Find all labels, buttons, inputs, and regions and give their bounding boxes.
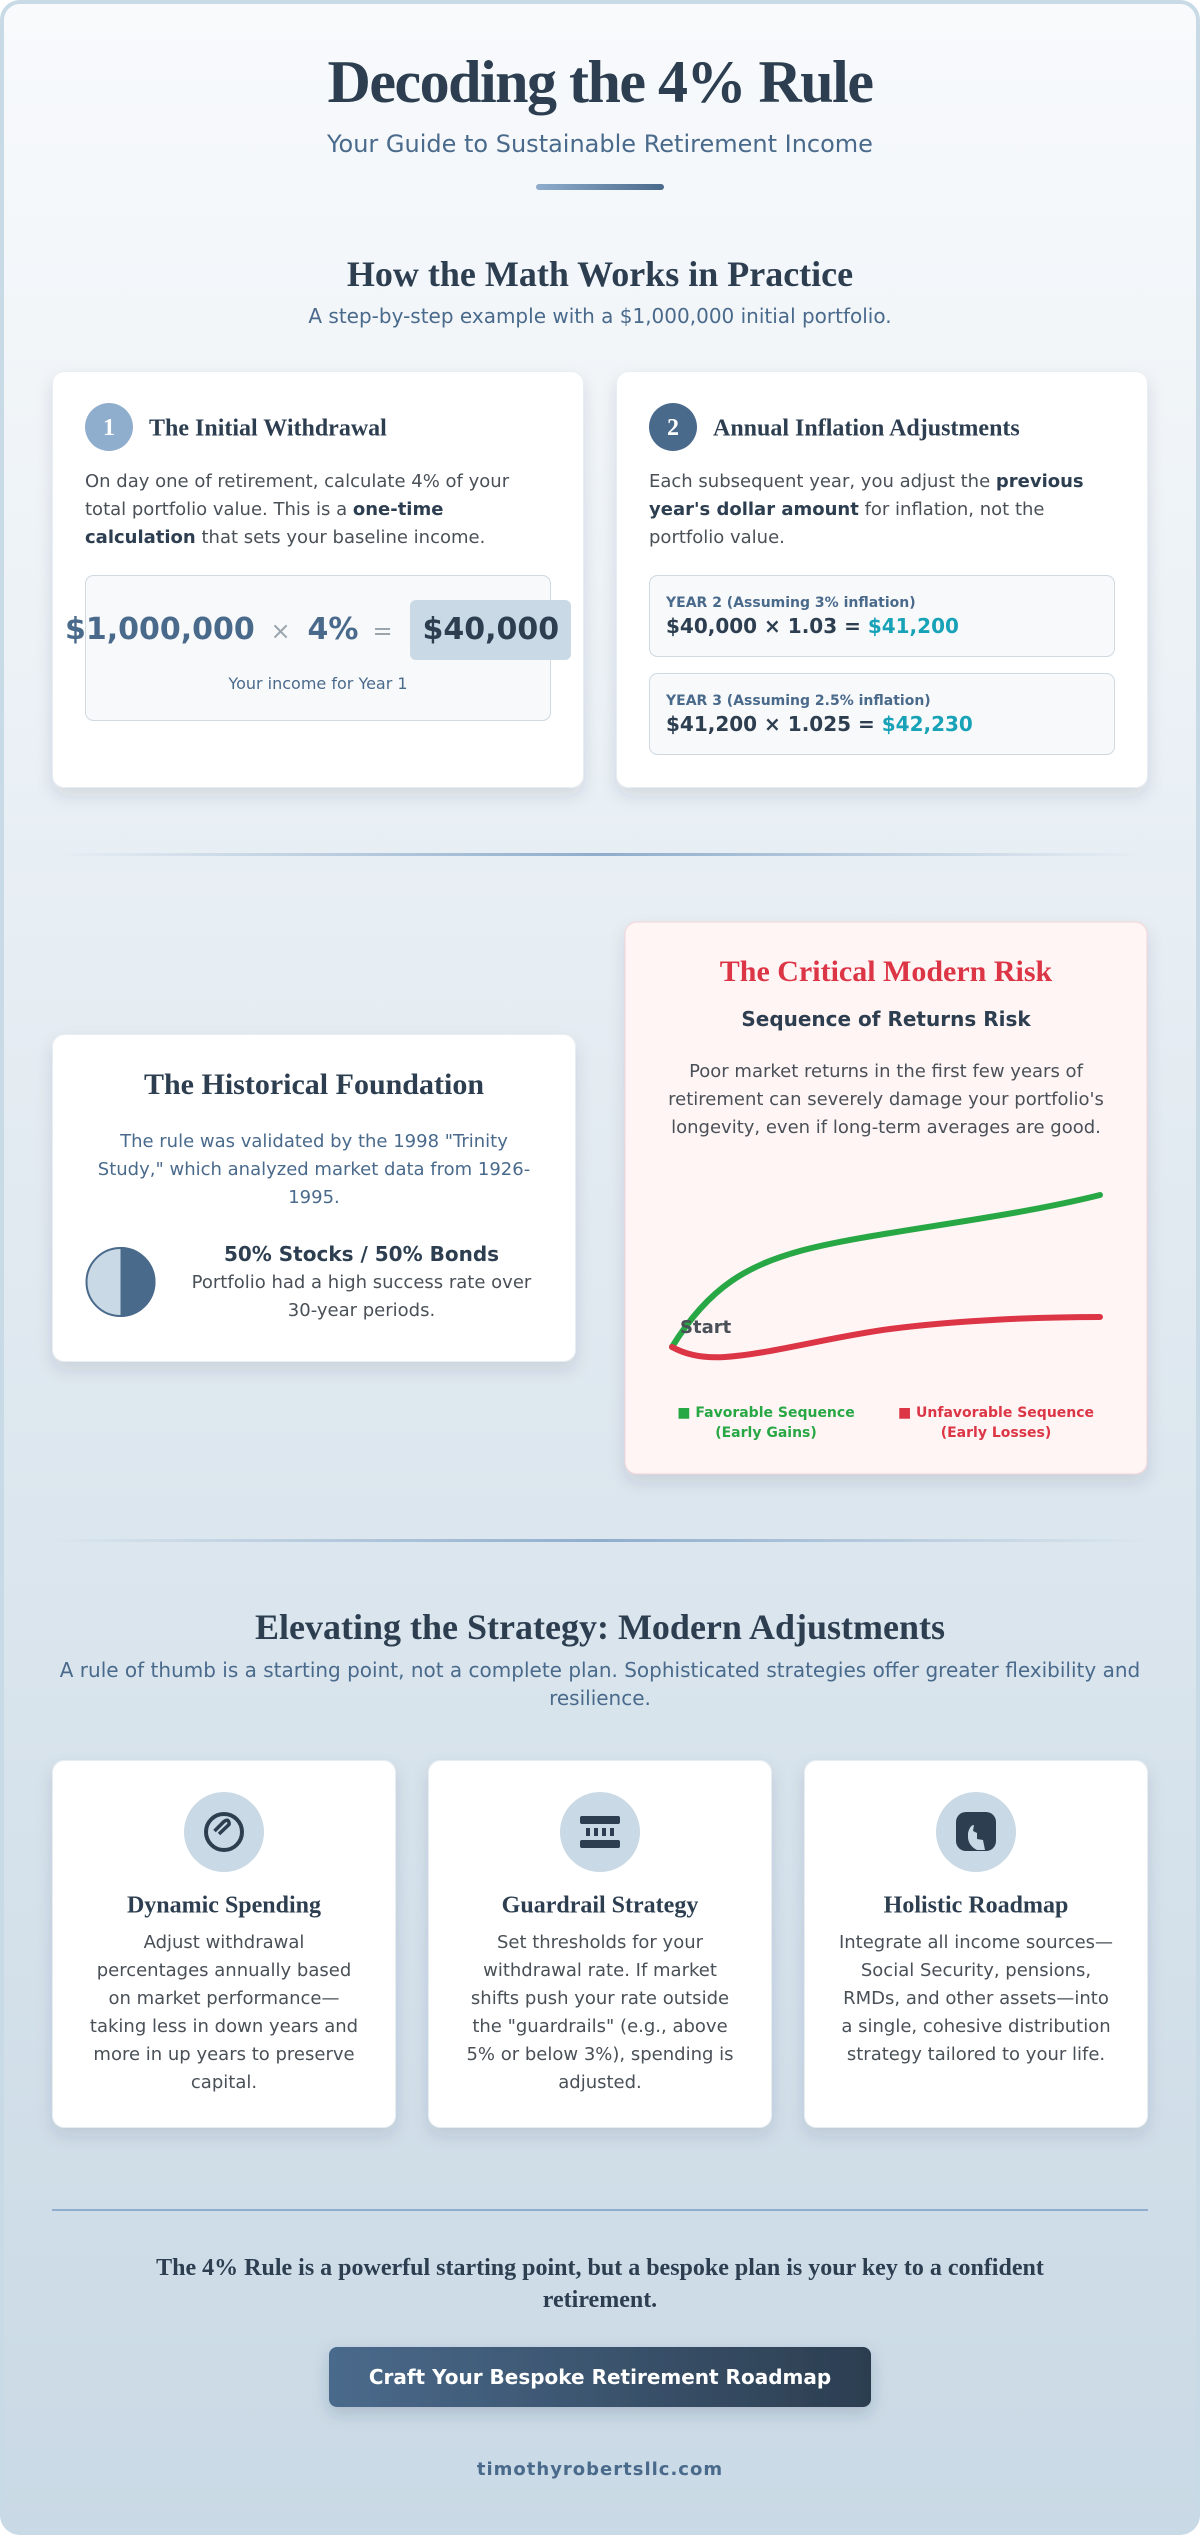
website url: timothyrobertsllc.com (477, 2459, 723, 2480)
title: Decoding the 4% Rule (328, 49, 873, 115)
year 3 box: $41,200 × 1.025 = $42,230 (666, 712, 973, 736)
subtitle: Your Guide to Sustainable Retirement Income (326, 130, 873, 158)
description: retirement can severely damage your portfolio's (668, 1089, 1104, 1110)
year 2 box (650, 576, 1114, 656)
description: Adjust withdrawal (144, 1932, 304, 1953)
description: The rule was validated by the 1998 "Trinity (119, 1131, 508, 1152)
description (466, 1932, 734, 2093)
step 2 heading: Annual Inflation Adjustments (713, 416, 1020, 442)
call to action button: Craft Your Bespoke Retirement Roadmap (369, 2365, 831, 2389)
year 3 box: YEAR 3 (Assuming 2.5% inflation) (665, 693, 931, 709)
step 2 text: portfolio value. (649, 527, 785, 548)
section heading: how the math works: A step-by-step example with a $1,000,000 initial portfolio. (308, 304, 892, 328)
line chart: sequence of returns (672, 1195, 1100, 1357)
step 2 text: year's dollar amount for inflation, not the (649, 499, 1044, 520)
description: Poor market returns in the first few years of (689, 1061, 1084, 1082)
formula box: 4% (308, 612, 358, 647)
description: Social Security, pensions, (861, 1960, 1091, 1981)
panel: critical modern risk (625, 922, 1147, 1474)
description (98, 1131, 530, 1208)
description: capital. (191, 2072, 257, 2093)
description (90, 1932, 358, 2093)
icon: guardrails (560, 1792, 640, 1872)
section heading: modern adjustments: A rule of thumb is a starting point, not a complete plan. Sophisticated strategies offer greater flexibility and (60, 1658, 1140, 1682)
section heading: how the math works (308, 254, 892, 328)
description: on market performance— (108, 1988, 340, 2009)
call to action button (329, 2347, 871, 2407)
allocation text (192, 1242, 532, 1321)
allocation text: Portfolio had a high success rate over (192, 1272, 532, 1293)
icon: step number 1: 1 (103, 415, 115, 441)
icon: step number 1 (85, 403, 133, 451)
formula box: = (372, 617, 393, 645)
panel: step 2 annual inflation adjustments (616, 372, 1148, 788)
legend: (Early Losses) (941, 1425, 1051, 1441)
icon: step number 2: 2 (667, 415, 679, 441)
heading: Holistic Roadmap (884, 1892, 1068, 1918)
legend: ■ Favorable Sequence (677, 1405, 855, 1421)
description: taking less in down years and (90, 2016, 358, 2037)
allocation text: 50% Stocks / 50% Bonds (224, 1242, 499, 1266)
header (326, 49, 873, 190)
heading: Guardrail Strategy (502, 1892, 698, 1918)
result highlight (410, 600, 571, 660)
description: RMDs, and other assets—into (843, 1988, 1109, 2009)
description: longevity, even if long-term averages are good. (671, 1117, 1101, 1138)
closing statement: The 4% Rule is a powerful starting point, but a bespoke plan is your key to a confident (156, 2255, 1044, 2281)
description: adjusted. (558, 2072, 642, 2093)
pie chart: 50/50 allocation (86, 1247, 156, 1317)
step 1 heading: The Initial Withdrawal (149, 416, 387, 442)
panel: step 1 initial withdrawal (52, 372, 584, 788)
closing statement (156, 2255, 1044, 2313)
legend: ■ Unfavorable Sequence (898, 1405, 1094, 1421)
description: 1995. (288, 1187, 340, 1208)
description: shifts push your rate outside (471, 1988, 729, 2009)
heading: The Historical Foundation (144, 1068, 484, 1101)
description: withdrawal rate. If market (483, 1960, 717, 1981)
section heading: modern adjustments (60, 1607, 1140, 1710)
section heading: modern adjustments: resilience. (549, 1686, 651, 1710)
formula box: × (270, 617, 291, 645)
description: Integrate all income sources— (839, 1932, 1113, 1953)
description: strategy tailored to your life. (847, 2044, 1105, 2065)
section heading: how the math works: How the Math Works in Practice (347, 254, 853, 294)
heading: Dynamic Spending (127, 1892, 321, 1918)
description: Study," which analyzed market data from 1926- (98, 1159, 530, 1180)
step 2 text (649, 471, 1084, 548)
description: the "guardrails" (e.g., above (472, 2016, 728, 2037)
formula box: Your income for Year 1 (227, 674, 408, 693)
step 1 text (85, 471, 510, 548)
icon: roadmap (936, 1792, 1016, 1872)
closing statement: retirement. (543, 2287, 657, 2313)
description (839, 1932, 1113, 2065)
formula box: $40,000 (422, 612, 559, 647)
year 2 box: YEAR 2 (Assuming 3% inflation) (665, 595, 916, 611)
icon: step number 2 (649, 403, 697, 451)
step 1 text: calculation that sets your baseline income. (85, 527, 485, 548)
panel: holistic roadmap (804, 1760, 1148, 2128)
description (668, 1061, 1104, 1138)
panel: guardrail strategy (428, 1760, 772, 2128)
section heading: modern adjustments: Elevating the Strategy: Modern Adjustments (255, 1607, 945, 1647)
legend (677, 1405, 1094, 1441)
allocation text: 30-year periods. (288, 1300, 435, 1321)
formula box (65, 576, 571, 720)
step 1 text: On day one of retirement, calculate 4% of your (85, 471, 510, 492)
legend: (Early Gains) (715, 1425, 817, 1441)
panel: dynamic spending (52, 1760, 396, 2128)
description: a single, cohesive distribution (841, 2016, 1111, 2037)
formula box: $1,000,000 (65, 612, 255, 647)
description: 5% or below 3%), spending is (466, 2044, 734, 2065)
icon: dial (184, 1792, 264, 1872)
description: Set thresholds for your (497, 1932, 704, 1953)
description: more in up years to preserve (93, 2044, 355, 2065)
subheading: Sequence of Returns Risk (741, 1007, 1031, 1031)
heading: The Critical Modern Risk (720, 955, 1053, 988)
panel: historical foundation (52, 1034, 576, 1362)
step 2 text: Each subsequent year, you adjust the previous (649, 471, 1084, 492)
year 3 box (650, 674, 1114, 754)
step 1 text: total portfolio value. This is a one-time (85, 499, 443, 520)
description: percentages annually based (97, 1960, 351, 1981)
year 2 box: $40,000 × 1.03 = $41,200 (666, 614, 959, 638)
line chart: sequence of returns: Start (680, 1317, 732, 1338)
accent bar (536, 184, 664, 190)
